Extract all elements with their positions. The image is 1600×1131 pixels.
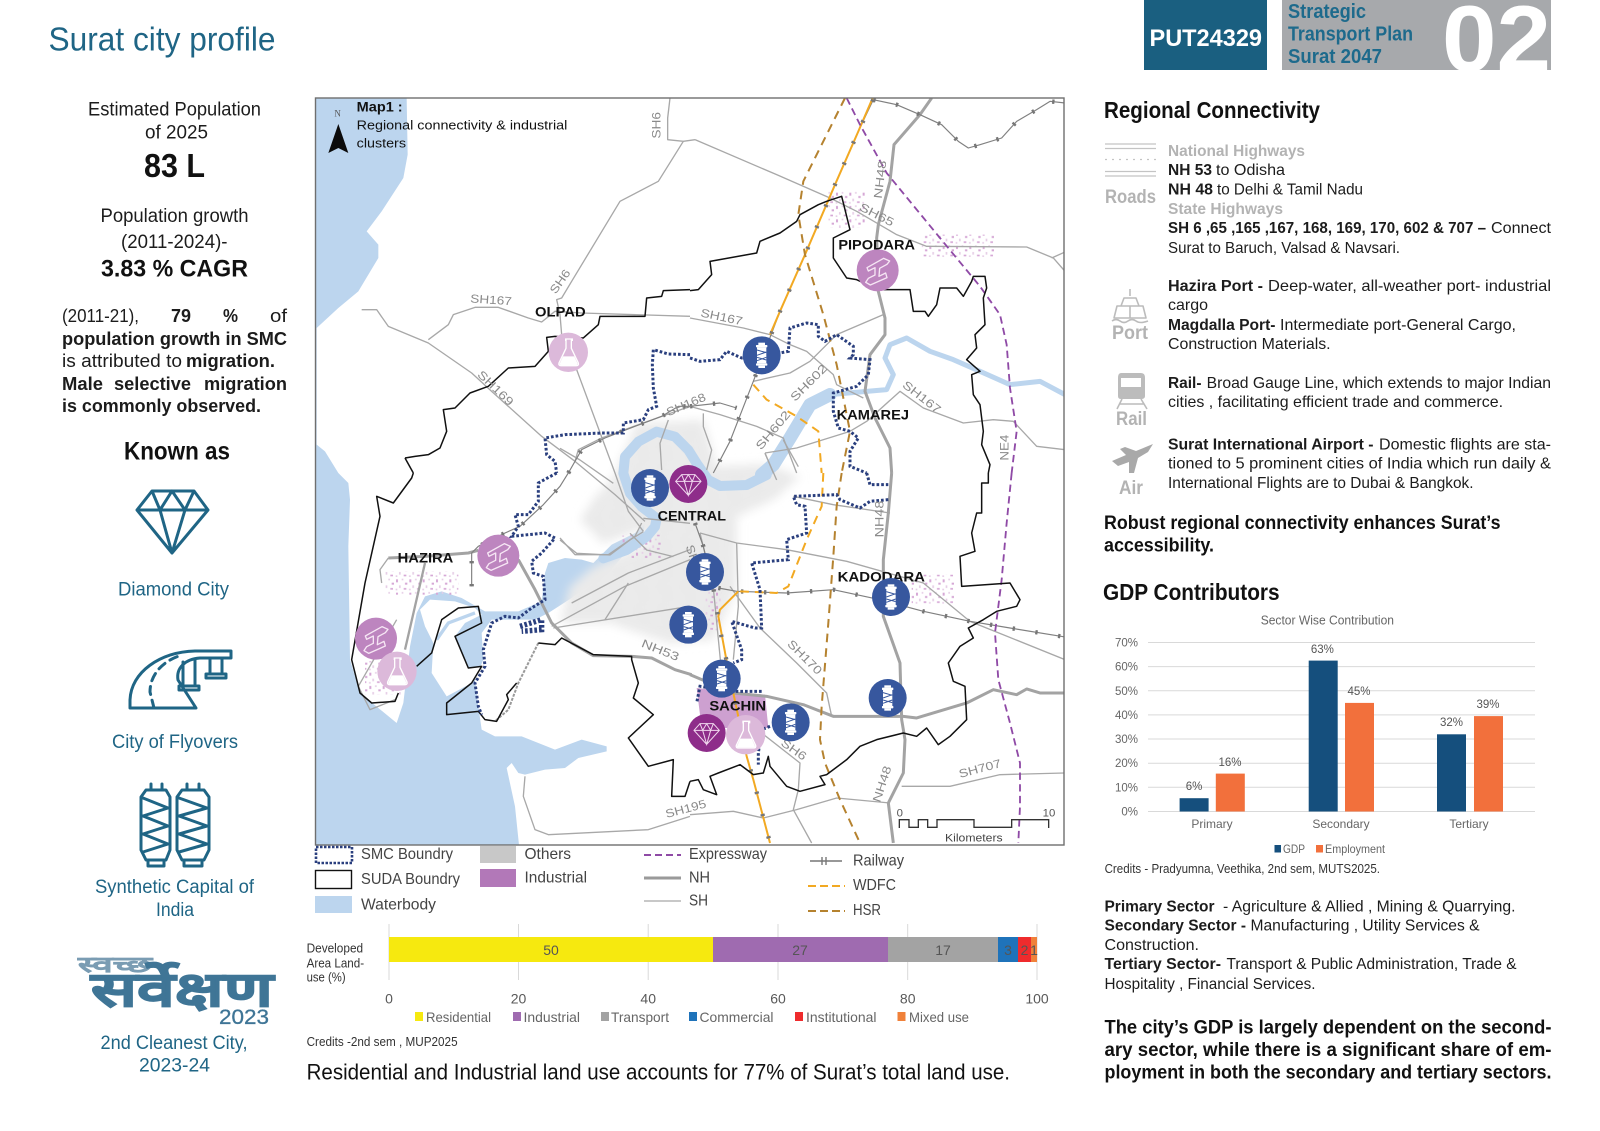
logo: swachh survekshan 2023 xyxy=(76,952,276,1029)
panel: air xyxy=(1112,436,1551,499)
bar value labels: 63% xyxy=(1311,644,1334,656)
chart legend: GDP xyxy=(1283,842,1305,856)
road labels: NH48 xyxy=(870,764,894,804)
SUDA boundary xyxy=(352,196,1020,796)
chart legend: Mixed use xyxy=(909,1009,969,1025)
chart legend xyxy=(1274,842,1386,856)
roads text: National Highways xyxy=(1168,143,1305,160)
legend: expressway: Expressway xyxy=(689,846,767,863)
sector definitions: Tertiary Sector- xyxy=(1104,956,1221,973)
label: 2nd cleanest city xyxy=(100,1033,248,1076)
sector definitions: Manufacturing , Utility Services & xyxy=(1250,918,1480,935)
CAGR value: 3.83 % CAGR xyxy=(101,256,248,282)
rail text: Rail- xyxy=(1168,375,1202,392)
icon: diamond xyxy=(137,491,208,553)
chart legend: Industrial xyxy=(524,1009,580,1025)
legend: HSR: HSR xyxy=(853,902,881,919)
roads text: NH 48 xyxy=(1168,182,1213,198)
waterbody: sea and estuary xyxy=(315,98,645,845)
road labels: SH602 xyxy=(753,408,793,453)
legend: SUDA boundary xyxy=(316,870,460,888)
population growth label: (2011-2024)- xyxy=(121,232,228,253)
header: project code box: PUT24329 xyxy=(1150,25,1262,52)
title: Surat city profile xyxy=(48,20,276,58)
road labels: SH167 xyxy=(699,307,744,328)
land use credits: Credits -2nd sem , MUP2025 xyxy=(307,1035,458,1049)
chart label: Area Land- xyxy=(307,956,364,970)
y axis labels: 10% xyxy=(1115,782,1138,794)
segment values: 27 xyxy=(792,942,808,958)
chart legend: Institutional xyxy=(806,1009,876,1025)
population growth label xyxy=(100,206,248,253)
SMC boundary xyxy=(475,323,888,765)
port text xyxy=(1168,278,1551,353)
port text: cargo xyxy=(1168,297,1208,314)
map title xyxy=(357,102,566,148)
chart legend: Employment xyxy=(1325,842,1386,856)
bar value labels: 16% xyxy=(1218,757,1242,769)
high speed rail xyxy=(798,98,860,843)
icon: train xyxy=(1116,373,1147,430)
axis labels: 60 xyxy=(770,990,786,1006)
y axis labels: 20% xyxy=(1115,758,1138,770)
road labels: SH6 xyxy=(683,543,703,573)
road labels: SH6 xyxy=(547,267,573,296)
legend: SH: SH xyxy=(689,892,708,910)
logo: swachh survekshan 2023: स्वच्छ xyxy=(76,952,154,977)
rail text: Broad Gauge Line, which extends to major Indian xyxy=(1207,375,1551,392)
map legend xyxy=(315,846,904,919)
railway lines xyxy=(472,100,1065,637)
population value: 83 L xyxy=(144,147,205,184)
road labels: NE4 xyxy=(998,434,1011,461)
icon: roads xyxy=(1105,144,1156,208)
GDP takeaway: The city’s GDP is largely dependent on the second- xyxy=(1104,1018,1552,1039)
port text: Magdalla Port- xyxy=(1168,317,1276,334)
map title: Regional connectivity & industrial xyxy=(357,118,567,133)
air text: tioned to 5 prominent cities of India which run daily & xyxy=(1168,456,1551,473)
migration paragraph: (2011-21), xyxy=(62,305,139,326)
roads text: NH 53 xyxy=(1168,162,1212,179)
GDP credits: Credits - Pradyumna, Veethika, 2nd sem, MUTS2025. xyxy=(1105,861,1380,876)
port text: Deep-water, all-weather port- industrial xyxy=(1268,278,1551,295)
chart legend xyxy=(415,1009,969,1025)
port text: Hazira Port - xyxy=(1168,278,1263,295)
land use takeaway: Residential and Industrial land use accounts for 77% of Surat’s total land use. xyxy=(307,1059,1010,1084)
y axis labels: 70% xyxy=(1115,638,1138,650)
air text: Surat International Airport - xyxy=(1168,436,1374,454)
GDP takeaway xyxy=(1104,1018,1552,1084)
road labels: SH6 xyxy=(651,112,664,139)
migration paragraph: of xyxy=(270,305,288,326)
bar chart: sector wise contribution xyxy=(1115,614,1535,856)
legend: expressway xyxy=(644,846,767,863)
icon: synthetic thread spools xyxy=(141,784,209,866)
icon: roads: Roads xyxy=(1105,187,1156,208)
legend: WDFC xyxy=(808,877,896,894)
label: diamond city: Diamond City xyxy=(118,580,229,601)
segment values: 1 xyxy=(1030,942,1038,958)
chart label xyxy=(307,942,364,984)
migration paragraph: population growth in SMC xyxy=(62,328,287,349)
connectivity takeaway xyxy=(1104,513,1500,557)
roads text: Connect xyxy=(1491,220,1552,237)
map title: Map1 : xyxy=(357,98,403,114)
legend: SMC boundary xyxy=(316,846,453,863)
panel: roads xyxy=(1105,143,1552,257)
panel: rail xyxy=(1116,373,1551,430)
roads text xyxy=(1168,143,1552,257)
road labels xyxy=(470,112,1011,821)
header: plan title box xyxy=(1282,0,1551,70)
label: 2nd cleanest city: 2023-24 xyxy=(139,1056,210,1076)
sector definitions: Hospitality , Financial Services. xyxy=(1104,976,1316,993)
y axis labels: 30% xyxy=(1115,734,1138,746)
logo: swachh survekshan 2023: सर्वेक्षण xyxy=(90,962,276,1017)
road labels: NH48 xyxy=(873,501,886,537)
header: plan title box: Surat 2047 xyxy=(1288,46,1382,68)
chart label: use (%) xyxy=(307,970,346,984)
icon: airplane: Air xyxy=(1119,478,1144,499)
sector definitions: Construction. xyxy=(1104,937,1199,954)
chart legend: Residential xyxy=(426,1009,491,1025)
chart legend: Commercial xyxy=(700,1009,774,1025)
legend: others xyxy=(480,846,571,863)
connectivity takeaway: Robust regional connectivity enhances Surat’s xyxy=(1104,513,1500,534)
north arrow xyxy=(328,108,348,153)
axis labels: 20 xyxy=(511,990,526,1006)
expressway xyxy=(847,98,1020,843)
segment values: 3 xyxy=(1004,942,1012,958)
migration paragraph: 79 xyxy=(171,305,191,326)
migration paragraph: is commonly observed. xyxy=(62,395,261,416)
road labels: SH6 xyxy=(778,736,809,763)
WDFC freight corridor xyxy=(695,98,873,843)
road labels: SH602 xyxy=(788,362,830,404)
segment values: 2 xyxy=(1021,942,1029,958)
chart title: Sector Wise Contribution xyxy=(1261,614,1394,628)
GDP takeaway: ployment in both the secondary and tertiary sectors. xyxy=(1104,1062,1552,1084)
heading: GDP contributors: GDP Contributors xyxy=(1103,579,1280,605)
estimated population label: of 2025 xyxy=(145,123,208,144)
migration paragraph: is attributed to xyxy=(62,350,182,371)
national highways xyxy=(388,98,1065,843)
place labels: PIPODARA xyxy=(838,237,915,253)
y axis labels: 60% xyxy=(1115,662,1138,674)
segment values xyxy=(543,942,1038,958)
population growth label: Population growth xyxy=(100,206,248,227)
chemical cluster pins xyxy=(377,333,765,754)
legend: NH: NH xyxy=(689,870,710,886)
roads text: to Odisha xyxy=(1216,162,1285,179)
textile cluster pins xyxy=(631,336,910,741)
legend: WDFC: WDFC xyxy=(853,877,896,894)
GDP bars xyxy=(1180,661,1466,812)
bar value labels: 39% xyxy=(1476,699,1500,711)
migration paragraph: migration xyxy=(204,373,287,394)
air text: Domestic flights are sta- xyxy=(1379,436,1551,454)
map: regional connectivity and industrial clusters xyxy=(315,98,1065,845)
axis labels: 100 xyxy=(1025,990,1049,1006)
bar value labels: 6% xyxy=(1186,781,1202,793)
sector definitions xyxy=(1104,899,1517,993)
scale bar xyxy=(897,809,1055,842)
north arrow: N xyxy=(334,108,341,118)
road labels: NH53 xyxy=(640,637,681,664)
migration paragraph: migration. xyxy=(186,350,275,371)
icon: ship: Port xyxy=(1112,323,1149,344)
GDP takeaway: ary sector, while there is a significant share of em- xyxy=(1104,1040,1552,1061)
migration paragraph: % xyxy=(223,305,238,326)
industrial areas xyxy=(365,191,995,728)
legend: HSR xyxy=(808,902,881,919)
legend: railway: Railway xyxy=(853,852,904,870)
road labels: SH167 xyxy=(470,292,512,308)
y axis labels: 40% xyxy=(1115,710,1138,722)
chart label: Developed xyxy=(307,942,363,956)
icon: airplane xyxy=(1112,444,1153,499)
place labels: OLPAD xyxy=(535,303,586,319)
road labels: SH170 xyxy=(785,638,825,678)
road labels: NH48 xyxy=(872,160,889,199)
migration paragraph: Male xyxy=(62,373,103,394)
road labels: SH169 xyxy=(475,368,516,409)
place labels: SACHIN xyxy=(709,697,766,713)
chart legend: Transport xyxy=(611,1009,669,1025)
legend: SUDA boundary: SUDA Boundry xyxy=(361,871,460,888)
stacked bar chart: developed area land use xyxy=(307,924,1049,1025)
sector definitions: - Agriculture & Allied , Mining & Quarrying. xyxy=(1223,899,1516,916)
steel cluster pins xyxy=(355,249,899,660)
logo: swachh survekshan 2023: 2023 xyxy=(219,1006,269,1029)
estimated population label: Estimated Population xyxy=(88,100,261,120)
legend: NH xyxy=(644,870,710,886)
migration paragraph: selective xyxy=(114,373,191,394)
road labels: SH707 xyxy=(957,757,1003,781)
legend: SMC boundary: SMC Boundry xyxy=(361,846,453,863)
legend: industrial xyxy=(480,869,587,887)
bar value labels xyxy=(1186,644,1500,793)
rail text xyxy=(1168,375,1551,411)
axis labels: 0 xyxy=(385,990,393,1006)
legend: industrial: Industrial xyxy=(524,870,587,886)
header: project code box xyxy=(1144,0,1267,70)
built-up area xyxy=(560,420,800,643)
scale bar: 10 xyxy=(1043,807,1055,819)
rail text: cities , facilitating efficient trade and commerce. xyxy=(1168,394,1503,411)
map frame xyxy=(316,98,1064,845)
air text: International Flights are to Dubai & Bangkok. xyxy=(1168,475,1474,492)
icon: flyover xyxy=(130,651,231,708)
air text xyxy=(1168,436,1551,492)
legend: waterbody: Waterbody xyxy=(361,896,436,914)
place labels: KADODARA xyxy=(838,568,925,584)
place labels: KAMAREJ xyxy=(837,407,909,423)
scale bar: 0 xyxy=(897,807,903,819)
segment values: 50 xyxy=(543,942,559,958)
axis labels xyxy=(385,990,1049,1006)
bar value labels: 45% xyxy=(1347,686,1371,698)
segment values: 17 xyxy=(935,942,951,958)
sector definitions: Primary Sector xyxy=(1104,899,1214,916)
icon: ship xyxy=(1112,289,1149,344)
header: plan title box: Strategic xyxy=(1288,1,1366,23)
roads text: State Highways xyxy=(1168,201,1283,218)
road labels: SH195 xyxy=(664,798,708,821)
roads text: SH 6 ,65 ,165 ,167, 168, 169, 170, 602 & 707 – xyxy=(1168,220,1486,237)
category labels xyxy=(1191,817,1489,831)
road labels: SH167 xyxy=(900,378,943,416)
estimated population label xyxy=(88,100,261,144)
place labels: HAZIRA xyxy=(398,549,453,565)
port text: Construction Materials. xyxy=(1168,336,1331,353)
heading: known as: Known as xyxy=(124,438,230,466)
sector definitions: Transport & Public Administration, Trade & xyxy=(1226,956,1517,973)
label: synthetic capital of india xyxy=(95,877,255,921)
legend: waterbody xyxy=(315,896,436,914)
migration paragraph xyxy=(62,305,288,416)
bar segments xyxy=(389,937,1037,962)
legend: others: Others xyxy=(524,846,571,863)
roads text: to Delhi & Tamil Nadu xyxy=(1217,182,1363,198)
label: 2nd cleanest city: 2nd Cleanest City, xyxy=(100,1033,248,1054)
y axis labels xyxy=(1115,638,1138,818)
road labels: SH168 xyxy=(664,391,708,419)
header: plan title box: Transport Plan xyxy=(1288,24,1413,46)
bar value labels: 32% xyxy=(1440,717,1463,729)
label: city of flyovers: City of Flyovers xyxy=(112,732,238,753)
label: synthetic capital of india: India xyxy=(156,900,194,921)
map title: clusters xyxy=(357,135,406,150)
heading: regional connectivity: Regional Connectivity xyxy=(1104,97,1320,123)
category labels: Tertiary xyxy=(1449,817,1489,831)
place labels: CENTRAL xyxy=(658,507,726,523)
panel: population statistics xyxy=(62,100,288,416)
label: synthetic capital of india: Synthetic Capital of xyxy=(95,877,255,898)
axis labels: 80 xyxy=(900,990,916,1006)
icon: train: Rail xyxy=(1116,409,1147,430)
panel: port xyxy=(1112,278,1551,353)
scale bar: Kilometers xyxy=(945,832,1003,844)
legend: railway xyxy=(810,852,904,870)
category labels: Primary xyxy=(1191,817,1233,831)
connectivity takeaway: accessibility. xyxy=(1104,536,1214,557)
axis labels: 40 xyxy=(640,990,656,1006)
category labels: Secondary xyxy=(1312,817,1370,831)
y axis labels: 0% xyxy=(1121,806,1138,818)
port text: Intermediate port-General Cargo, xyxy=(1280,317,1516,334)
y axis labels: 50% xyxy=(1115,686,1138,698)
legend: SH xyxy=(644,892,708,910)
place labels xyxy=(398,237,925,713)
state highways xyxy=(358,98,1065,843)
roads text: Surat to Baruch, Valsad & Navsari. xyxy=(1168,240,1400,257)
river tapi xyxy=(603,338,1065,558)
employment bars xyxy=(1216,703,1503,812)
road labels: SH65 xyxy=(857,201,896,229)
diamond cluster pins xyxy=(669,465,726,752)
sector definitions: Secondary Sector - xyxy=(1104,918,1246,935)
